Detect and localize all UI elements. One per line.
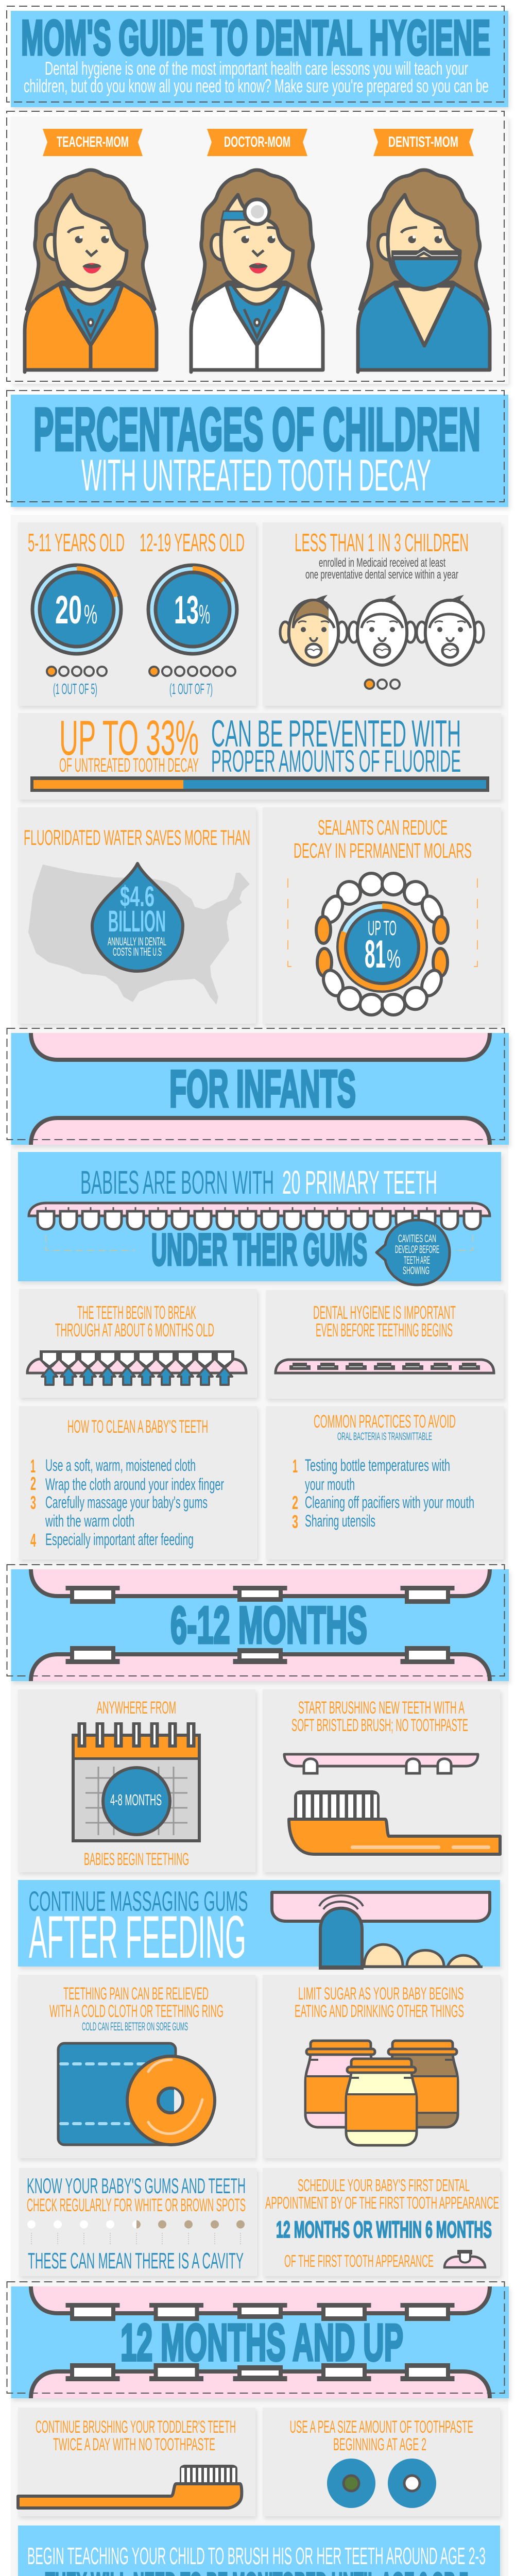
- callout: cavities: CAVITIES CAN: [398, 1233, 436, 1245]
- spots: [27, 2221, 245, 2244]
- numbered list: 3: [292, 1511, 298, 1532]
- icon: baby food jars: [305, 2041, 458, 2145]
- panel: age percentages: (1 OUT OF 7): [169, 681, 213, 698]
- icon: calendar: [73, 1722, 199, 1841]
- heading: TEETHING PAIN CAN BE RELIEVED: [63, 1984, 209, 2004]
- chart: 81 percent ring: %: [387, 944, 401, 973]
- dots: 1 out of 3: [365, 680, 400, 689]
- icon: closed gum: [276, 1360, 494, 1373]
- heading: BEGINNING AT AGE 2: [333, 2435, 426, 2454]
- icon: water drop with savings: COSTS IN THE U.S: [113, 945, 162, 958]
- icon: first tooth: [444, 2250, 485, 2267]
- panel: pea sized toothpaste: [263, 2408, 500, 2516]
- dots: 1 out of 5: [47, 667, 107, 676]
- numbered list: 1: [30, 1455, 36, 1477]
- icon: finger massaging gum: [272, 1892, 490, 1968]
- heading: KNOW YOUR BABY'S GUMS AND TEETH: [27, 2174, 246, 2198]
- section header: percentages: [7, 391, 508, 507]
- icon: gum with new teeth: [284, 1754, 478, 1773]
- panel: age percentages: [18, 522, 256, 706]
- numbered list: [292, 1455, 474, 1532]
- intro text: [24, 58, 489, 96]
- heading: [313, 1302, 456, 1341]
- panel: continue brushing: [18, 2408, 255, 2516]
- heading: [265, 2176, 499, 2212]
- numbered list: with the warm cloth: [45, 1512, 134, 1530]
- map: united states: [28, 865, 250, 1005]
- panel: start brushing: [263, 1689, 500, 1872]
- ribbon: doctor mom: DOCTOR-MOM: [224, 134, 290, 150]
- numbered list: Carefully massage your baby's gums: [45, 1493, 208, 1512]
- section header: 6-12 months: [7, 1565, 509, 1681]
- heading: [49, 1984, 224, 2021]
- progress bar: [30, 776, 489, 792]
- icon: cloth and teething ring: [58, 2043, 215, 2145]
- chart: 20 percent donut: 20: [55, 588, 82, 632]
- panel: first dental appointment: [263, 2168, 500, 2276]
- ribbon: teacher mom: [43, 129, 143, 156]
- numbered list: Sharing utensils: [305, 1512, 375, 1530]
- panel: teeth break through: [19, 1289, 257, 1398]
- heading: FOR INFANTS: [169, 1060, 356, 1118]
- heading: [294, 816, 472, 862]
- panel: fluoride prevention: [18, 710, 501, 800]
- numbered list: 2: [30, 1473, 36, 1494]
- panel: teeth break through: THROUGH AT ABOUT 6 MONTHS OLD: [55, 1319, 214, 1341]
- panel: continue brushing: CONTINUE BRUSHING YOUR TODDLER'S TEETH: [36, 2417, 236, 2437]
- panel: how to clean teeth: HOW TO CLEAN A BABY'S TEETH: [67, 1417, 208, 1437]
- panel: know gums and teeth: CHECK REGULARLY FOR WHITE OR BROWN SPOTS: [27, 2195, 246, 2215]
- dashed bracket: [46, 1235, 473, 1250]
- numbered list: Use a soft, warm, moistened cloth: [45, 1456, 196, 1475]
- callout: cavities: SHOWING: [403, 1265, 430, 1277]
- stat: UP TO 33%: [59, 710, 199, 766]
- numbered list: Wrap the cloth around your index finger: [45, 1475, 224, 1494]
- stat: [59, 710, 199, 776]
- panel: fluoridated water savings: [18, 807, 256, 1024]
- numbered list: 4: [30, 1530, 36, 1551]
- panel: teach brushing: [18, 2526, 500, 2576]
- callout: cavities: DEVELOP BEFORE: [395, 1244, 439, 1256]
- icon: gum with hidden teeth: [29, 1203, 490, 1229]
- ribbon: dentist mom: DENTIST-MOM: [388, 134, 458, 150]
- panel: teething pain: [18, 1975, 255, 2158]
- panel: hygiene before teething: [266, 1290, 504, 1399]
- panel: fluoride prevention: OF UNTREATED TOOTH DECAY: [59, 755, 199, 776]
- heading: FLUORIDATED WATER SAVES MORE THAN: [24, 825, 250, 850]
- description: [305, 556, 458, 582]
- chart: 81 percent ring: 81: [365, 933, 386, 976]
- statement: [211, 713, 461, 778]
- panel: teething timing: BABIES BEGIN TEETHING: [84, 1850, 189, 1869]
- panel: sealants: [263, 807, 501, 1024]
- panel: primary teeth: [18, 1152, 501, 1285]
- panel: age percentages: 12-19 YEARS OLD: [140, 529, 245, 557]
- numbered list: Especially important after feeding: [45, 1530, 194, 1549]
- icon: calendar: 4-8 MONTHS: [110, 1791, 162, 1809]
- chart: 81 percent ring: [338, 903, 426, 991]
- chart: 13 percent donut: 13: [174, 588, 199, 632]
- heading: BABIES ARE BORN WITH: [80, 1164, 274, 1201]
- section header: 12 months and up: [7, 2282, 509, 2398]
- icon: teacher mom: [25, 170, 157, 372]
- callout: cavities: TEETH ARE: [404, 1255, 430, 1266]
- numbered list: 3: [30, 1492, 36, 1513]
- heading: [289, 2417, 473, 2454]
- section header: for infants: [7, 1028, 509, 1145]
- panel: teething pain: COLD CAN FEEL BETTER ON SORE GUMS: [82, 2020, 188, 2033]
- panel: medicaid children: [263, 522, 501, 706]
- ribbon: dentist mom: [373, 129, 474, 156]
- ribbon: doctor mom: [207, 129, 307, 156]
- panel: teething pain: WITH A COLD CLOTH OR TEETHING RING: [49, 2002, 224, 2021]
- icon: water drop with savings: BILLION: [108, 905, 166, 938]
- icon: dentist mom: [358, 170, 490, 372]
- heading: [55, 1302, 214, 1341]
- header: main title: [7, 6, 508, 107]
- numbered list: your mouth: [305, 1475, 355, 1494]
- numbered list: 1: [293, 1455, 298, 1477]
- panel: how to clean teeth: [19, 1406, 257, 1560]
- icon: three babies: [280, 597, 484, 665]
- icon: teeth erupting with arrows: [27, 1350, 246, 1385]
- heading: 6-12 MONTHS: [170, 1597, 367, 1654]
- chart: 13 percent donut: %: [199, 600, 210, 630]
- heading: ANYWHERE FROM: [97, 1698, 176, 1718]
- icon: toothbrush: [18, 2465, 242, 2508]
- icon: toothbrush: [289, 1790, 500, 1854]
- icon: teeth arch: [316, 873, 448, 1015]
- panel: age percentages: (1 OUT OF 5): [53, 681, 97, 698]
- callout: cavities: [376, 1220, 450, 1285]
- ribbon: teacher mom: TEACHER-MOM: [57, 134, 129, 150]
- dots: 1 out of 7: [149, 667, 235, 676]
- panel: practices to avoid: [266, 1406, 504, 1560]
- panel: teething timing: [18, 1689, 255, 1872]
- molar bracket: [288, 878, 477, 967]
- heading: [295, 1984, 464, 2021]
- chart: 81 percent ring: UP TO: [368, 917, 397, 940]
- heading: TWICE A DAY WITH NO TOOTHPASTE: [53, 2435, 215, 2454]
- panel: massaging gums: AFTER FEEDING: [29, 1903, 246, 1971]
- icon: water drop with savings: $4.6: [120, 880, 154, 912]
- numbered list: 2: [292, 1492, 298, 1513]
- icon: pea amount: [327, 2459, 436, 2508]
- heading: CONTINUE MASSAGING GUMS: [29, 1885, 248, 1917]
- numbered list: [30, 1455, 224, 1551]
- panel: limit sugar: [263, 1975, 500, 2158]
- panel: three moms: [7, 111, 508, 384]
- heading: [36, 2417, 236, 2454]
- icon: water drop with savings: ANNUALLY IN DENTAL: [108, 935, 166, 948]
- chart: 20 percent donut: [32, 565, 121, 654]
- chart: 13 percent donut: [148, 565, 237, 654]
- heading: THE TEETH BEGIN TO BREAK: [77, 1302, 196, 1323]
- panel: age percentages: 5-11 YEARS OLD: [28, 529, 125, 557]
- background strip: [11, 515, 508, 2576]
- icon: water drop with savings: [92, 863, 183, 971]
- chart: 20 percent donut: %: [84, 600, 97, 630]
- caption: THESE CAN MEAN THERE IS A CAVITY: [28, 2248, 244, 2274]
- heading: [291, 1698, 468, 1735]
- icon: doctor mom: [191, 170, 323, 372]
- panel: know gums and teeth: [19, 2168, 257, 2276]
